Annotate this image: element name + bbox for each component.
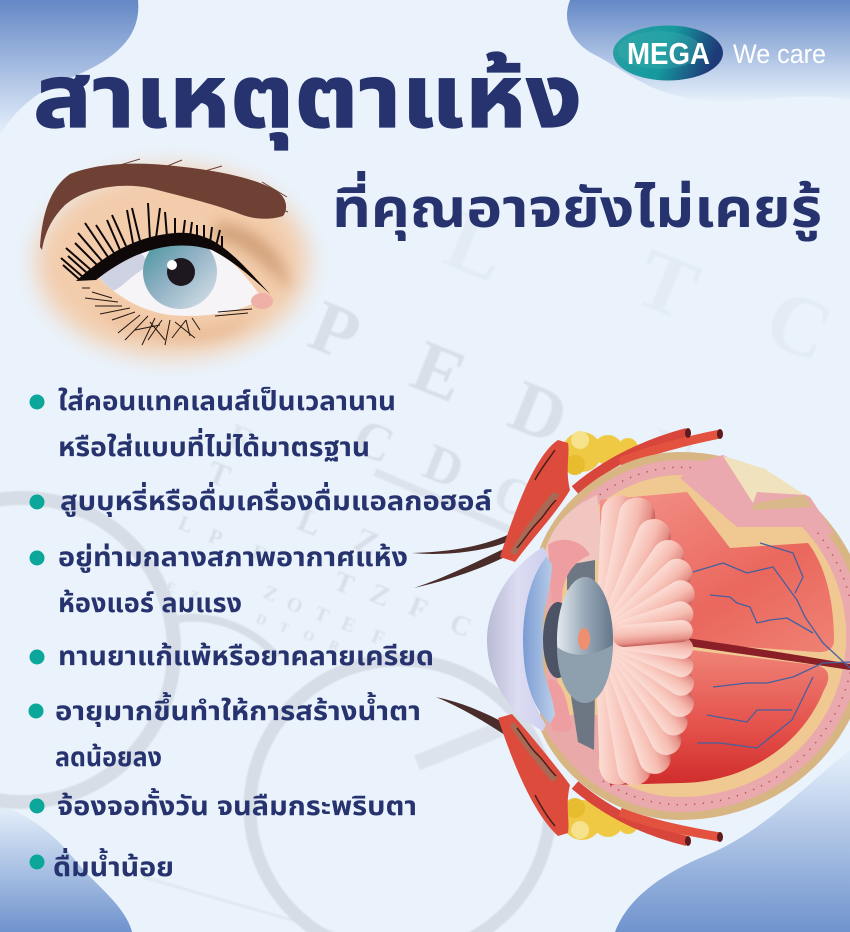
muscle upper tendon: [510, 492, 560, 555]
pupil: [167, 258, 195, 286]
retina band: [558, 475, 846, 797]
eye chart backdrop: Z: [365, 578, 394, 613]
eye chart backdrop: E: [248, 539, 270, 567]
eye chart backdrop: E: [164, 580, 178, 597]
eye chart backdrop: T: [623, 230, 711, 339]
nerve fibres: [412, 533, 514, 735]
highlight: [167, 260, 177, 270]
cornea: [487, 547, 548, 731]
bullet 2: สูบบุหรี่หรือดื่มเครื่องดื่มแอลกอฮอล์: [60, 482, 492, 517]
sclera shadow: [97, 253, 146, 290]
eye chart backdrop: L: [292, 501, 327, 544]
eye chart backdrop: D: [499, 365, 579, 461]
bullet 1: หรือใส่แบบที่ไม่ได้มาตรฐาน: [58, 428, 370, 462]
eye chart backdrop: P: [299, 285, 371, 378]
retinal vessels: [693, 543, 850, 748]
illustration: human eye: [36, 159, 308, 357]
muscle upper stripes: [517, 450, 556, 548]
bullet 6: จ้องจอทั้งวัน จนลืมกระพริบตา: [57, 788, 417, 821]
zonule fibres: [567, 560, 595, 750]
iris: [523, 555, 555, 724]
lens nucleus: [578, 628, 590, 650]
fat lower: [562, 798, 638, 840]
muscle lower tendon: [510, 722, 558, 782]
upper chamber: [600, 492, 834, 652]
skin: [36, 167, 308, 357]
corner shape: top right: [567, 0, 850, 101]
bullet 5: อายุมากขึ้นทำให้การสร้างน้ำตา: [55, 692, 421, 727]
bullet 7: ดื่มน้ำน้อย: [53, 848, 174, 882]
iris: [143, 235, 217, 309]
eye chart backdrop: L: [175, 510, 197, 538]
eye chart backdrop: R: [327, 638, 342, 656]
eye chart backdrop: F: [222, 415, 257, 461]
eyelid shadow: [215, 222, 290, 290]
ciliary petals: [595, 494, 700, 788]
bullet 3: ห้องแอร์ ลมแรง: [58, 588, 242, 618]
main vessel: [613, 626, 850, 670]
muscle upper: [500, 440, 570, 562]
eyeglasses backdrop: [0, 472, 550, 932]
eye chart backdrop: T: [277, 620, 291, 637]
eye chart backdrop: E: [338, 612, 359, 638]
logo: We care: [733, 39, 826, 69]
upper lid line: [76, 233, 270, 294]
eyebrow: [40, 159, 288, 250]
lower chamber: [600, 645, 828, 785]
corner shape: bottom right: [615, 750, 850, 932]
eye chart backdrop: Z: [187, 588, 201, 605]
fat upper: [562, 431, 638, 475]
eye chart backdrop: L: [433, 192, 521, 301]
logo: MEGA: [627, 36, 710, 71]
eye chart backdrop: C: [753, 270, 845, 381]
lens: [557, 577, 613, 703]
eye chart backdrop: F: [368, 625, 388, 650]
logo: [613, 26, 826, 80]
eye chart backdrop: D: [254, 612, 269, 630]
corner shape: bottom left: [0, 805, 132, 932]
bullet 4: ทานยาแก้แพ้หรือยาคลายเครียด: [58, 641, 434, 671]
eyeball outer sclera: [540, 452, 850, 820]
eye chart backdrop: O: [486, 463, 544, 531]
under-eye shadow: [95, 300, 255, 339]
pale fibres upper: [545, 495, 605, 565]
caruncle: [251, 293, 273, 309]
upper lashes: [61, 203, 222, 280]
eye chart backdrop: C: [445, 608, 476, 644]
eye chart backdrop: C: [346, 408, 402, 475]
eye chart backdrop: Z: [260, 581, 281, 607]
eye chart backdrop: O: [301, 628, 316, 646]
eye chart backdrop: O: [283, 592, 306, 618]
cutaway sclera edge: [752, 495, 812, 510]
lens lower section: [557, 645, 613, 703]
pupil: [543, 602, 573, 678]
subtitle: ที่คุณอาจยังไม่เคยรู้: [332, 171, 822, 241]
bullet list: [28, 386, 492, 882]
eye chart backdrop: F: [404, 591, 432, 626]
corner shape: top left: [0, 0, 138, 135]
choroid: [546, 460, 850, 812]
lower vessels: [575, 785, 723, 846]
eye chart backdrop: T: [329, 566, 359, 602]
eye chart backdrop: T: [202, 453, 236, 494]
eye chart backdrop: P: [205, 523, 226, 551]
pale fibres lower: [545, 715, 603, 780]
muscle lower: [498, 714, 570, 836]
bullet 7: [30, 848, 174, 882]
eye chart backdrop: T: [311, 602, 332, 628]
pink iris root: [548, 540, 590, 732]
bullet 5: [28, 692, 421, 772]
upper vessels: [575, 428, 723, 490]
cutaway sclera cream: [723, 456, 805, 503]
title: สาเหตุตาแห้ง: [33, 47, 582, 150]
bullet 5: ลดน้อยลง: [55, 742, 162, 772]
eye chart backdrop: Z: [349, 521, 384, 564]
lower lashes: [82, 288, 252, 345]
bullet 3: [30, 542, 408, 618]
cutaway choroid step: [680, 455, 835, 535]
bullet 1: ใส่คอนแทคเลนส์เป็นเวลานาน: [58, 386, 396, 416]
bullet 3: อยู่ท่ามกลางสภาพอากาศแห้ง: [58, 542, 408, 573]
muscle lower stripes: [517, 728, 556, 826]
sclera: [97, 243, 262, 316]
eye chart backdrop: [164, 192, 845, 656]
eye chart backdrop: F: [634, 413, 703, 501]
eye chart backdrop: D: [416, 433, 472, 500]
eye chart backdrop: E: [401, 325, 477, 419]
choroid speckle: [552, 467, 850, 805]
illustration: eye anatomy: [412, 428, 850, 846]
bullet 1: [30, 386, 396, 462]
